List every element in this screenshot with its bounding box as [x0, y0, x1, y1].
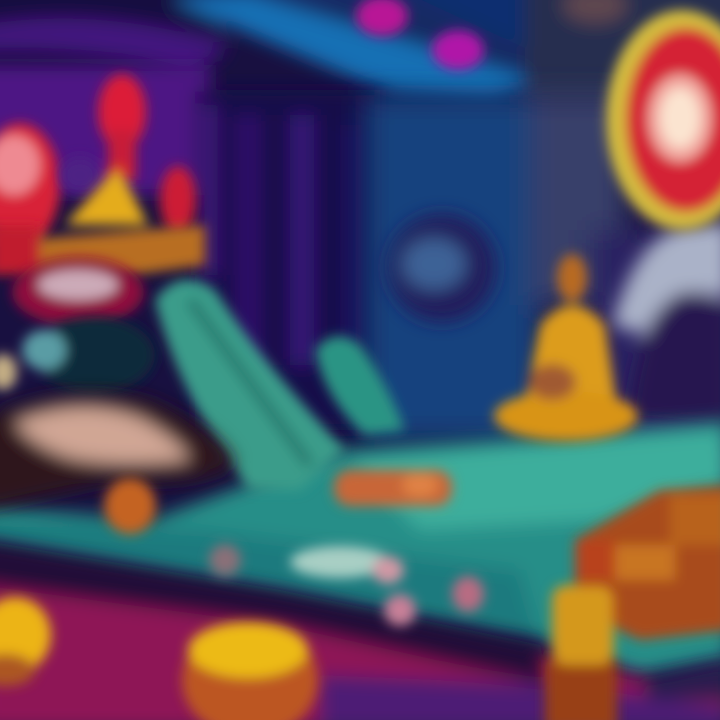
icon: teal balloon [315, 336, 405, 435]
panel: blue wall [365, 95, 720, 450]
icon: magenta ceiling lights [356, 0, 484, 70]
icon: stack of coins on table [334, 470, 452, 506]
icon: grinning mouth [12, 258, 144, 326]
icon: gold block stack [575, 485, 720, 640]
icon: target badge [606, 10, 720, 230]
icon: gold cushion left [0, 597, 51, 686]
icon: red crown spike [60, 74, 196, 234]
icon: gold cushion centre [182, 622, 318, 720]
icon: silver arch and dark mound [612, 222, 720, 430]
character: red crown figure [0, 74, 205, 326]
icon: golden bell [494, 254, 638, 441]
icon: gold crown [0, 165, 205, 285]
panel: teal table [0, 420, 720, 675]
panel: ceiling [0, 0, 720, 105]
icon: cards and chips [209, 544, 484, 626]
icon: dark teal shadow with pale orbs [0, 317, 155, 393]
icon: orange chip [104, 478, 156, 534]
icon: red orb [0, 123, 60, 247]
icon: resting hand [0, 393, 235, 510]
icon: wall roulette circle [388, 214, 496, 322]
panel: purple curtain [0, 65, 380, 430]
icon: teal slide [155, 280, 345, 490]
icon: golden bottle [545, 585, 617, 720]
panel: floor and table edge [0, 540, 720, 720]
